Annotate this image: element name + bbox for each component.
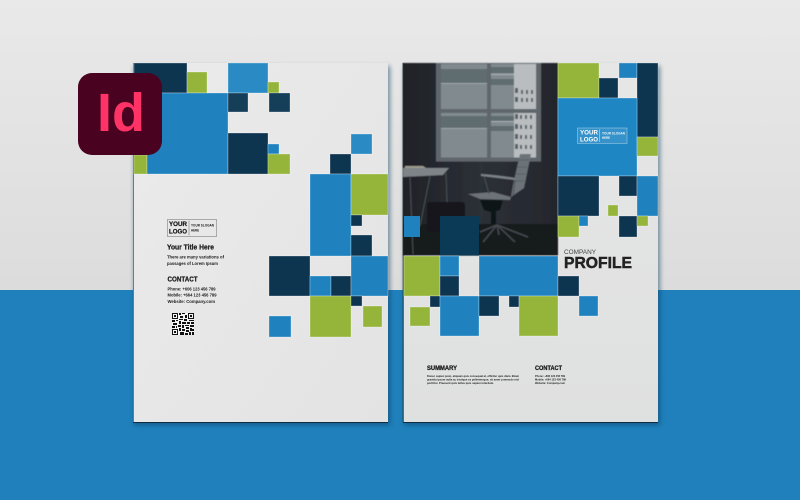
left page: title block: There are many variations of: [167, 254, 224, 259]
right page: white logo: YOUR: [580, 130, 598, 136]
left page: contact block: Website: Company.com: [168, 299, 215, 304]
left page: colour squares top cluster: [134, 63, 290, 174]
right page: company profile heading: PROFILE: [564, 255, 632, 272]
right page: squares over photo: [404, 216, 479, 256]
right page: summary block: Donec sapien justo, aliquam quis consequat at, efficitur quis diam. Etiam: [427, 374, 519, 378]
right page: summary block: gravida ipsum nulla ac tristique ex pellentesque, sit amet commodo nisl: [427, 377, 519, 381]
right page: contact block: Mobile: +664 123 456 789: [535, 377, 566, 381]
left page: logo: YOUR: [169, 221, 187, 228]
right page: company profile heading: COMPANY: [564, 249, 596, 256]
floor: [403, 224, 558, 255]
right page: white logo: HERE: [602, 136, 610, 140]
left page: contact block: CONTACT: [168, 276, 198, 284]
right page: white logo: LOGO: [580, 136, 598, 144]
right page: contact block: [535, 366, 566, 385]
right page: summary block: SUMMARY: [427, 366, 457, 372]
right page: office photo: [403, 63, 558, 256]
left page: colour squares right cluster: [269, 134, 388, 337]
bag: [427, 202, 465, 232]
left brochure page: [133, 63, 390, 425]
right page: summary block: [427, 366, 519, 385]
window frame: [436, 63, 541, 162]
right page: summary block: porttitor. Praesent quis tellus quis sapien interdum.: [427, 381, 494, 385]
icon: InDesign app badge: d: [112, 83, 145, 143]
right page: contact block: Phone: +606 123 456 789: [535, 374, 565, 378]
icon: InDesign app badge: [78, 73, 162, 155]
left page: contact block: [168, 276, 217, 304]
right brochure page: [403, 63, 660, 425]
right page: white logo: YOUR SLOGAN: [602, 132, 626, 136]
right page: colour squares top cluster: [558, 63, 658, 237]
desk: [403, 168, 449, 177]
left page: logo: LOGO: [169, 228, 187, 236]
left page: contact block: Mobile: +664 123 456 789: [168, 293, 217, 298]
left page: title block: Your Title Here: [167, 242, 214, 252]
chair: [468, 154, 531, 242]
icon: InDesign app badge: I: [97, 83, 112, 143]
right page: contact block: Website: Company.com: [535, 381, 565, 385]
left page: logo: HERE: [191, 228, 199, 232]
left page: QR code: [172, 313, 194, 335]
right page: white logo: [578, 128, 627, 144]
left page: contact block: Phone: +606 123 456 789: [168, 286, 216, 291]
background blue band: [0, 290, 800, 500]
right page: colour squares bottom cluster: [404, 256, 598, 336]
left page: logo: YOUR SLOGAN: [191, 224, 215, 228]
right page: contact block: CONTACT: [535, 366, 562, 372]
left page: title block: passages of Lorem Ipsum: [167, 261, 218, 266]
background wall: [0, 0, 800, 290]
left page: title block: [167, 242, 224, 266]
left page: logo: [168, 220, 216, 236]
